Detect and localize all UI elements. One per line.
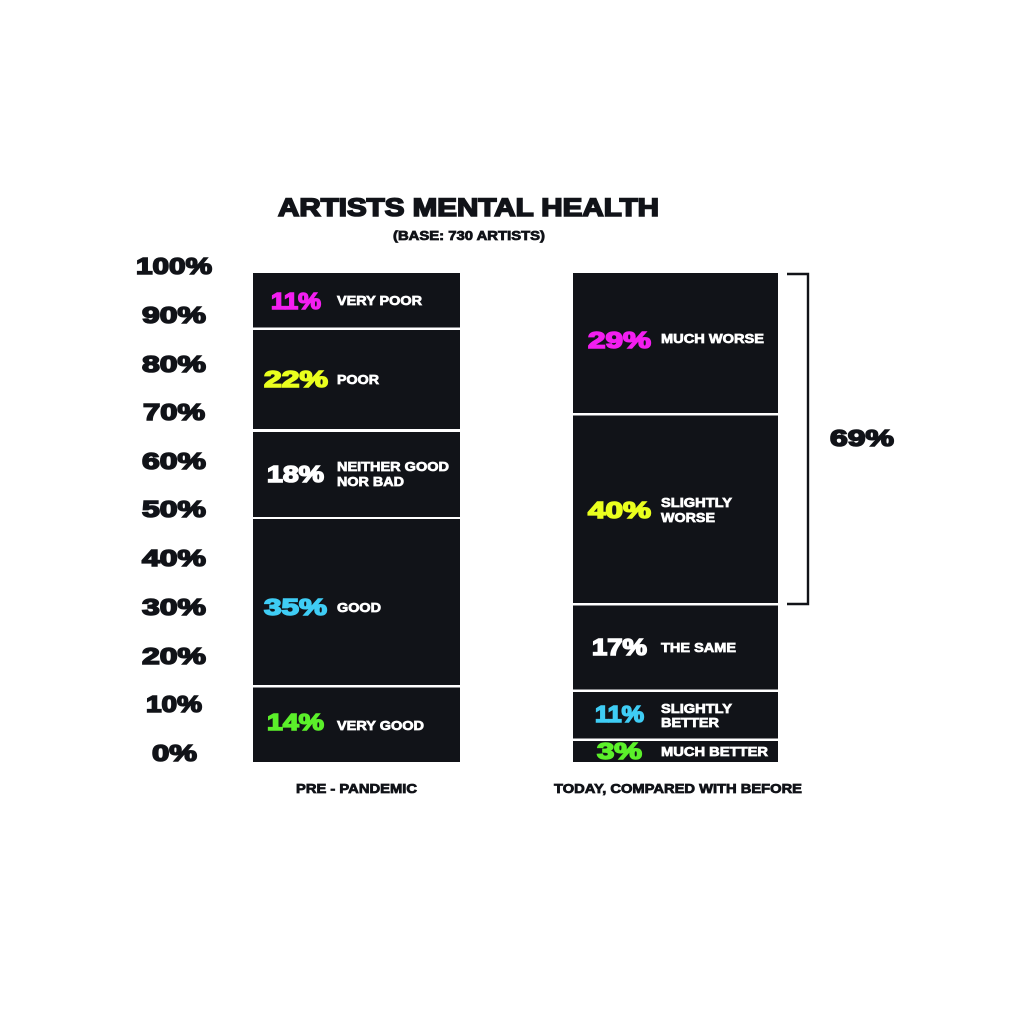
segment: good 35%: 35% [264,594,327,620]
y axis labels: 50% [142,496,206,522]
segment: neither good nor bad 18%: NEITHER GOOD [337,459,449,474]
segment: poor 22% [253,330,460,429]
y axis labels [136,253,212,766]
segment: very good 14% [253,688,460,762]
y axis labels: 100% [136,253,212,279]
y axis labels: 20% [142,643,206,669]
y axis labels: 80% [142,351,206,377]
segment: very good 14%: 14% [267,709,324,735]
segment: neither good nor bad 18%: 18% [267,461,324,487]
y axis labels: 30% [142,594,206,620]
segment: slightly worse 40%: WORSE [661,510,715,525]
segment: slightly better 11%: 11% [595,701,644,727]
segment: slightly better 11%: SLIGHTLY [661,701,732,716]
segment: much better 3%: 3% [597,738,642,764]
y axis labels: 40% [142,545,206,571]
subtitle: base: (BASE: 730 ARTISTS) [393,229,545,243]
segment: the same 17%: 17% [592,634,647,660]
panel: today stacked bar [573,273,778,764]
segment: much worse 29%: MUCH WORSE [661,331,764,346]
segment: slightly worse 40% [573,416,778,603]
segment: very poor 11%: 11% [271,288,321,314]
segment: the same 17%: THE SAME [661,640,736,655]
y axis labels: 0% [152,740,197,766]
segment: the same 17% [573,606,778,690]
bracket: 69% total [787,274,808,604]
segment: poor 22%: 22% [264,366,328,392]
segment: much better 3% [573,738,778,764]
segment: neither good nor bad 18% [253,432,460,517]
title: ARTISTS MENTAL HEALTH [278,194,659,222]
segment: slightly better 11% [573,692,778,738]
segment: slightly better 11%: BETTER [661,715,720,730]
y axis labels: 10% [146,691,202,717]
segment: neither good nor bad 18%: NOR BAD [337,474,404,489]
segment: much better 3%: MUCH BETTER [661,744,769,759]
caption: today: TODAY, COMPARED WITH BEFORE [554,781,802,796]
segment: much worse 29%: 29% [588,327,651,353]
segment: slightly worse 40%: 40% [588,497,651,523]
callout: 69%: 69% [830,425,894,451]
y axis labels: 60% [142,448,206,474]
segment: very good 14%: VERY GOOD [337,718,424,733]
segment: much worse 29% [573,273,778,413]
segment: very poor 11%: VERY POOR [337,293,423,308]
segment: good 35% [253,519,460,685]
segment: good 35%: GOOD [337,600,381,615]
segment: slightly worse 40%: SLIGHTLY [661,495,732,510]
y axis labels: 70% [143,399,205,425]
caption: pre-pandemic: PRE - PANDEMIC [296,781,418,796]
panel: pre-pandemic stacked bar [253,273,460,762]
segment: very poor 11% [253,273,460,328]
y axis labels: 90% [142,302,206,328]
segment: poor 22%: POOR [337,372,380,387]
